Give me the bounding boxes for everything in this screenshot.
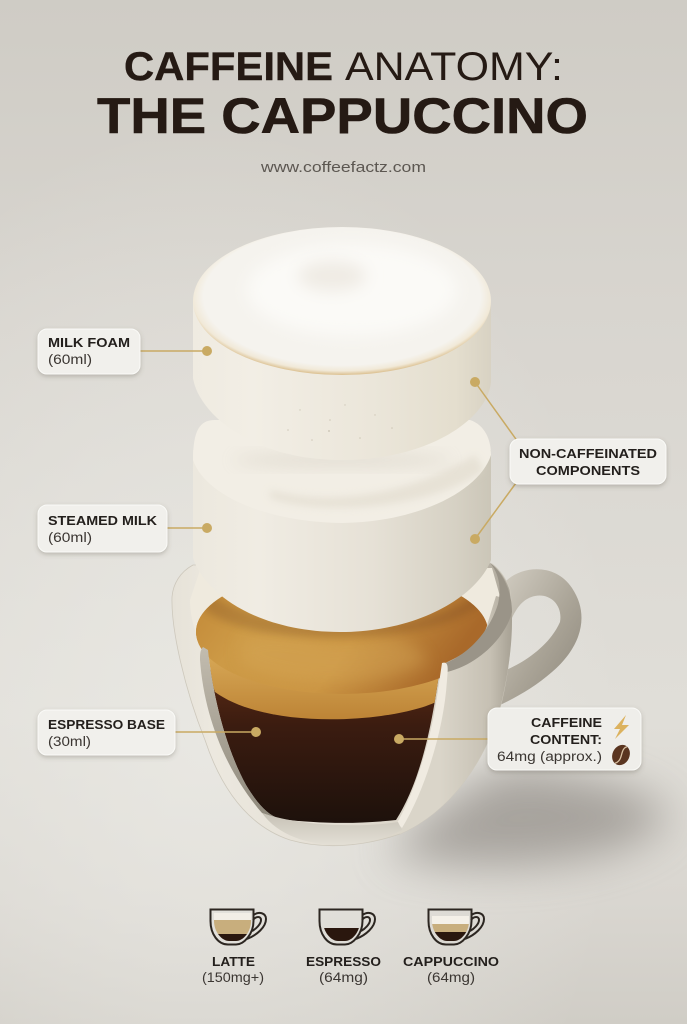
comparison: cappuccino: (64mg) bbox=[427, 970, 475, 985]
label: non-caffeinated components: COMPONENTS bbox=[536, 463, 640, 478]
comparison: cappuccino: CAPPUCCINO bbox=[403, 954, 499, 969]
cup base ring bbox=[262, 813, 402, 845]
milk top surface bbox=[193, 420, 491, 523]
illustration: cappuccino cup with layers bbox=[172, 227, 581, 846]
label: milk foam bbox=[38, 329, 140, 374]
foam top surface bbox=[193, 227, 491, 375]
crema swirl bbox=[256, 640, 424, 680]
callout: caffeine content: CAFFEINE bbox=[531, 715, 602, 730]
comparison: latte: (150mg+) bbox=[202, 970, 264, 985]
comparison: espresso: (64mg) bbox=[319, 970, 368, 985]
espresso liquid in cutaway bbox=[208, 658, 438, 823]
label: non-caffeinated components bbox=[510, 439, 666, 484]
foam shadow on crema bbox=[206, 598, 476, 640]
steamed milk layer bbox=[193, 420, 491, 632]
milk ripple bbox=[270, 455, 484, 508]
label: steamed milk: STEAMED MILK bbox=[48, 513, 158, 528]
cup right wall bbox=[398, 596, 512, 834]
cut edge right bbox=[397, 663, 448, 828]
milk side bbox=[193, 450, 491, 632]
label: milk foam: (60ml) bbox=[48, 352, 92, 367]
dark coffee bbox=[210, 670, 438, 823]
callout: caffeine content: CONTENT: bbox=[530, 732, 602, 747]
label: non-caffeinated components: NON-CAFFEINATED bbox=[519, 446, 657, 461]
callout: caffeine content: 64mg (approx.) bbox=[497, 749, 602, 764]
label: espresso base bbox=[38, 710, 175, 755]
cup body bbox=[172, 563, 512, 846]
foam side speckle bbox=[287, 404, 393, 441]
comparison: espresso bbox=[306, 910, 381, 985]
title: ANATOMY: bbox=[345, 45, 563, 89]
title: THE CAPPUCCINO bbox=[97, 88, 588, 144]
comparison: latte bbox=[202, 910, 266, 985]
icon: espresso cup bbox=[318, 910, 375, 944]
title bbox=[97, 45, 588, 144]
title: CAFFEINE bbox=[124, 45, 333, 89]
milk foam layer bbox=[193, 227, 491, 460]
icon: latte cup bbox=[209, 910, 266, 944]
comparison: cappuccino bbox=[403, 910, 499, 985]
cut wall left bbox=[200, 647, 280, 819]
shadow beneath foam bbox=[232, 453, 452, 467]
cup right rim bbox=[443, 563, 512, 672]
cup inner wall bbox=[190, 568, 501, 668]
label: steamed milk bbox=[38, 505, 167, 552]
icon: coffee bean bbox=[609, 742, 633, 768]
website url: www.coffeefactz.com bbox=[260, 159, 426, 176]
comparison: latte: LATTE bbox=[212, 954, 255, 969]
icon: cappuccino cup bbox=[427, 910, 484, 944]
crema band bbox=[208, 658, 438, 720]
crema surface bbox=[196, 570, 488, 694]
label: espresso base: (30ml) bbox=[48, 734, 91, 749]
callout: caffeine content bbox=[488, 708, 641, 770]
crema surface front bbox=[196, 596, 487, 694]
comparison: espresso: ESPRESSO bbox=[306, 954, 381, 969]
icon: lightning bolt bbox=[614, 715, 629, 739]
label: steamed milk: (60ml) bbox=[48, 530, 92, 545]
label: espresso base: ESPRESSO BASE bbox=[48, 717, 165, 732]
label: milk foam: MILK FOAM bbox=[48, 335, 130, 350]
foam side bbox=[193, 300, 491, 460]
cup shadow bbox=[385, 768, 670, 866]
leader lines and dots bbox=[140, 346, 518, 744]
foam swirl bbox=[260, 256, 444, 324]
cup handle bbox=[498, 569, 581, 706]
